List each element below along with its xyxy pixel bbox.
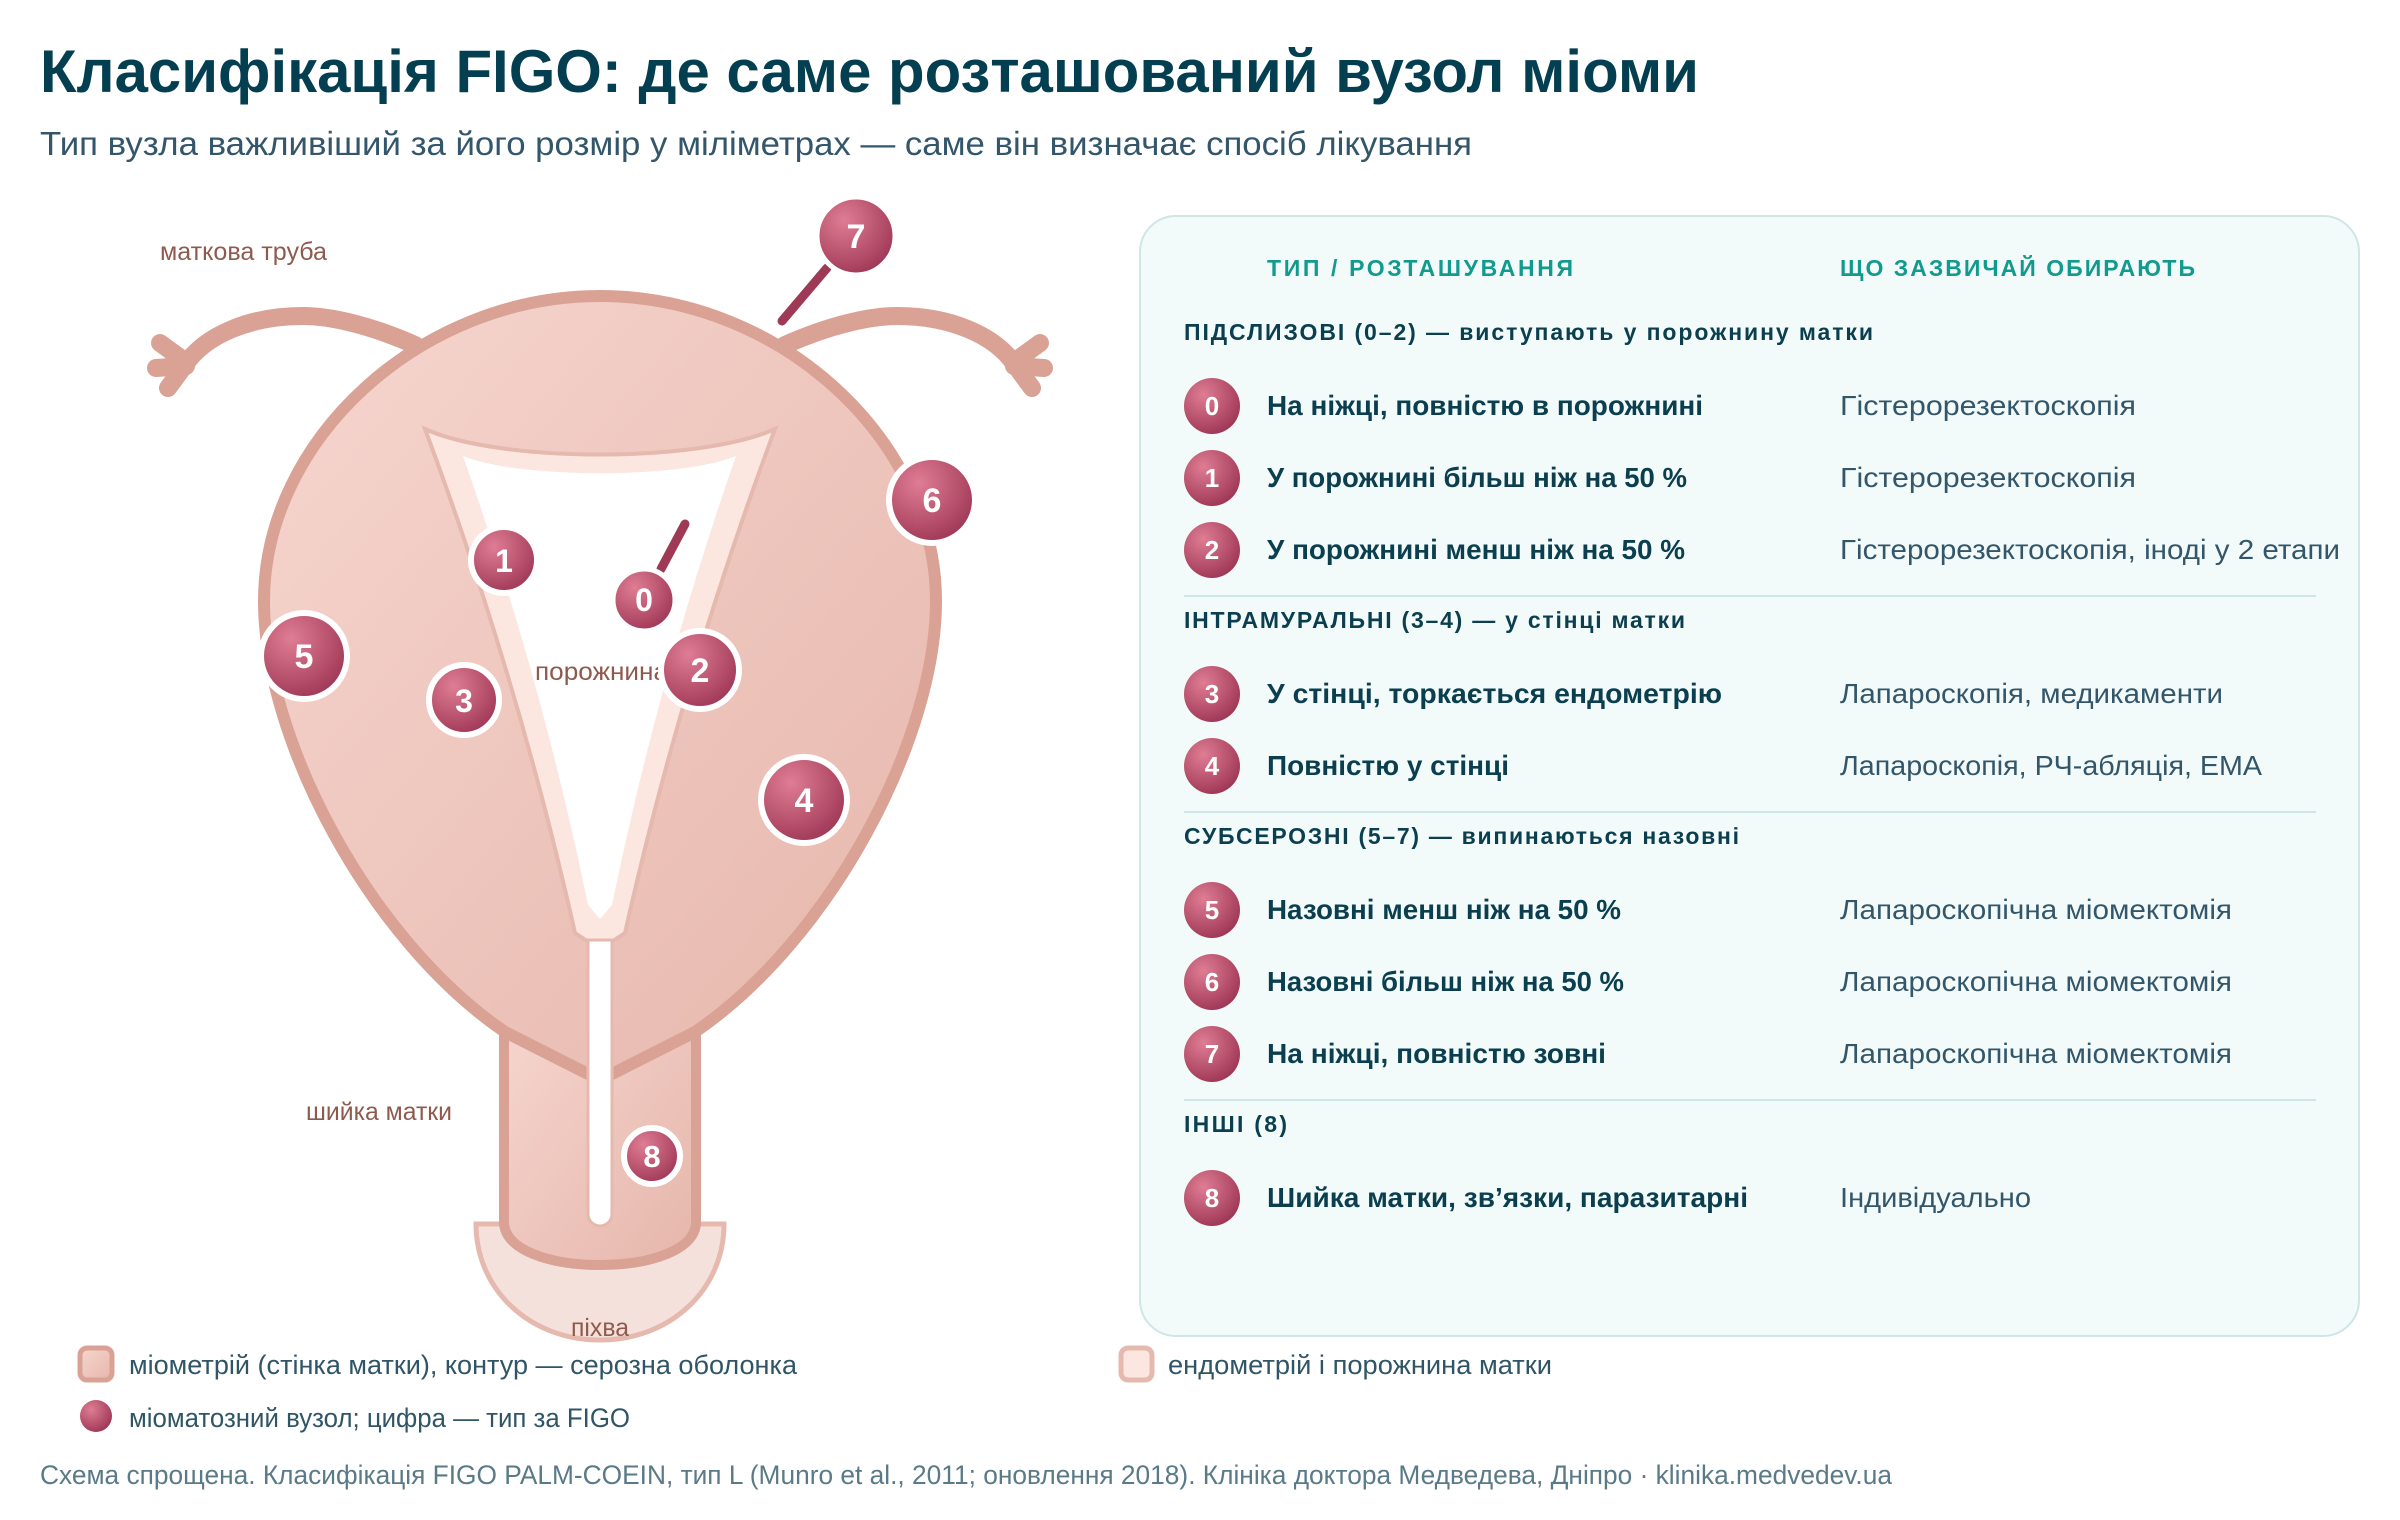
node 7: 7	[847, 218, 865, 256]
legend text: node: міоматозний вузол; цифра — тип за FIGO	[129, 1403, 630, 1433]
row 1: Гістерорезектоскопія	[1840, 462, 2136, 493]
row 3: 3	[1205, 679, 1219, 709]
column header: choice: ЩО ЗАЗВИЧАЙ ОБИРАЮТЬ	[1840, 254, 2195, 281]
node 3	[429, 665, 499, 735]
endometrium	[425, 429, 775, 941]
row 3	[1184, 666, 2223, 722]
node 2: 2	[691, 652, 709, 690]
row 7: Лапароскопічна міомектомія	[1840, 1038, 2232, 1069]
row 5: Лапароскопічна міомектомія	[1840, 894, 2232, 925]
row 6	[1184, 954, 2232, 1010]
row 8: 8	[1205, 1183, 1219, 1213]
right fallopian tube	[785, 316, 1044, 388]
label: tube: маткова труба	[160, 238, 327, 266]
row 4: Лапароскопія, РЧ-абляція, ЕМА	[1840, 750, 2262, 781]
cervical canal	[588, 940, 612, 1226]
row 1	[1184, 450, 2136, 506]
row 0	[1184, 378, 2136, 434]
row 2: Гістерорезектоскопія, іноді у 2 етапи	[1840, 534, 2340, 565]
row 5	[1184, 882, 2232, 938]
node 4: 4	[795, 782, 814, 820]
uterine cavity	[463, 456, 736, 919]
node 3: 3	[455, 683, 473, 719]
row 7	[1184, 1026, 2232, 1082]
legend text: myometrium: міометрій (стінка матки), контур — серозна оболонка	[129, 1350, 798, 1380]
group heading: submucosal: ПІДСЛИЗОВІ (0–2) — виступають у порожнину матки	[1184, 319, 1873, 345]
row 0: Гістерорезектоскопія	[1840, 390, 2136, 421]
row 4: Повністю у стінці	[1267, 750, 1509, 781]
legend swatch: myometrium	[80, 1348, 112, 1380]
node 1	[471, 527, 537, 593]
row 7: 7	[1205, 1039, 1219, 1069]
stalk of node 0	[661, 524, 685, 569]
row 1: У порожнині більш ніж на 50 %	[1267, 462, 1687, 493]
row 4: 4	[1205, 751, 1220, 781]
legend swatch: node	[80, 1400, 112, 1432]
group heading: other: ІНШІ (8)	[1184, 1111, 1287, 1137]
panel: classification table	[1140, 216, 2359, 1336]
title: Класифікація FIGO: де саме розташований вузол міоми	[40, 38, 1699, 105]
uterus diagram	[156, 197, 1044, 1342]
row 8: Індивідуально	[1840, 1182, 2031, 1213]
row 8	[1184, 1170, 2031, 1226]
row 1: 1	[1205, 463, 1219, 493]
panel background	[1140, 216, 2359, 1336]
row 5: Назовні менш ніж на 50 %	[1267, 894, 1621, 925]
row 2: 2	[1205, 535, 1219, 565]
row 6: 6	[1205, 967, 1219, 997]
row 4	[1184, 738, 2262, 794]
subtitle: Тип вузла важливіший за його розмір у міліметрах — саме він визначає спосіб лікування	[40, 125, 1472, 162]
group heading: intramural: ІНТРАМУРАЛЬНІ (3–4) — у стінці матки	[1184, 607, 1685, 633]
node 7	[817, 197, 895, 275]
node 4	[761, 757, 847, 843]
row 3: Лапароскопія, медикаменти	[1840, 678, 2223, 709]
group heading: subserosal: СУБСЕРОЗНІ (5–7) — випинаються назовні	[1184, 823, 1739, 849]
row 0: 0	[1205, 391, 1219, 421]
node 0	[613, 569, 675, 631]
node 0: 0	[635, 582, 653, 618]
label: cavity: порожнина	[535, 658, 668, 686]
node 6	[889, 457, 975, 543]
legend swatch: endometrium	[1121, 1348, 1152, 1380]
node 6: 6	[923, 482, 941, 520]
row 0: На ніжці, повністю в порожнині	[1267, 390, 1703, 421]
row 5: 5	[1205, 895, 1219, 925]
node 5	[261, 613, 347, 699]
row 6: Лапароскопічна міомектомія	[1840, 966, 2232, 997]
node 5: 5	[295, 638, 313, 676]
row 3: У стінці, торкається ендометрію	[1267, 678, 1722, 709]
row 7: На ніжці, повністю зовні	[1267, 1038, 1606, 1069]
footer note: Схема спрощена. Класифікація FIGO PALM-COEIN, тип L (Munro et al., 2011; оновлення 2018). Клініка доктора Медведева, Дніпро · klinika.medvedev.ua	[40, 1460, 1893, 1490]
legend text: endometrium: ендометрій і порожнина матки	[1168, 1350, 1552, 1380]
vagina	[476, 1224, 724, 1340]
label: cervix: шийка матки	[306, 1098, 452, 1126]
cervix	[504, 1000, 696, 1265]
node 2	[661, 631, 739, 709]
row 8: Шийка матки, зв’язки, паразитарні	[1267, 1182, 1748, 1213]
row 6: Назовні більш ніж на 50 %	[1267, 966, 1624, 997]
uterine body	[264, 296, 936, 1080]
node 8: 8	[643, 1139, 661, 1174]
left fallopian tube	[156, 316, 415, 388]
row 2	[1184, 522, 2340, 578]
stalk of node 7	[782, 268, 827, 321]
node 8	[624, 1128, 680, 1184]
legend	[80, 1348, 1552, 1433]
label: vagina: піхва	[571, 1314, 629, 1342]
row 2: У порожнині менш ніж на 50 %	[1267, 534, 1685, 565]
node 1: 1	[495, 543, 513, 579]
column header: type: ТИП / РОЗТАШУВАННЯ	[1267, 255, 1573, 281]
